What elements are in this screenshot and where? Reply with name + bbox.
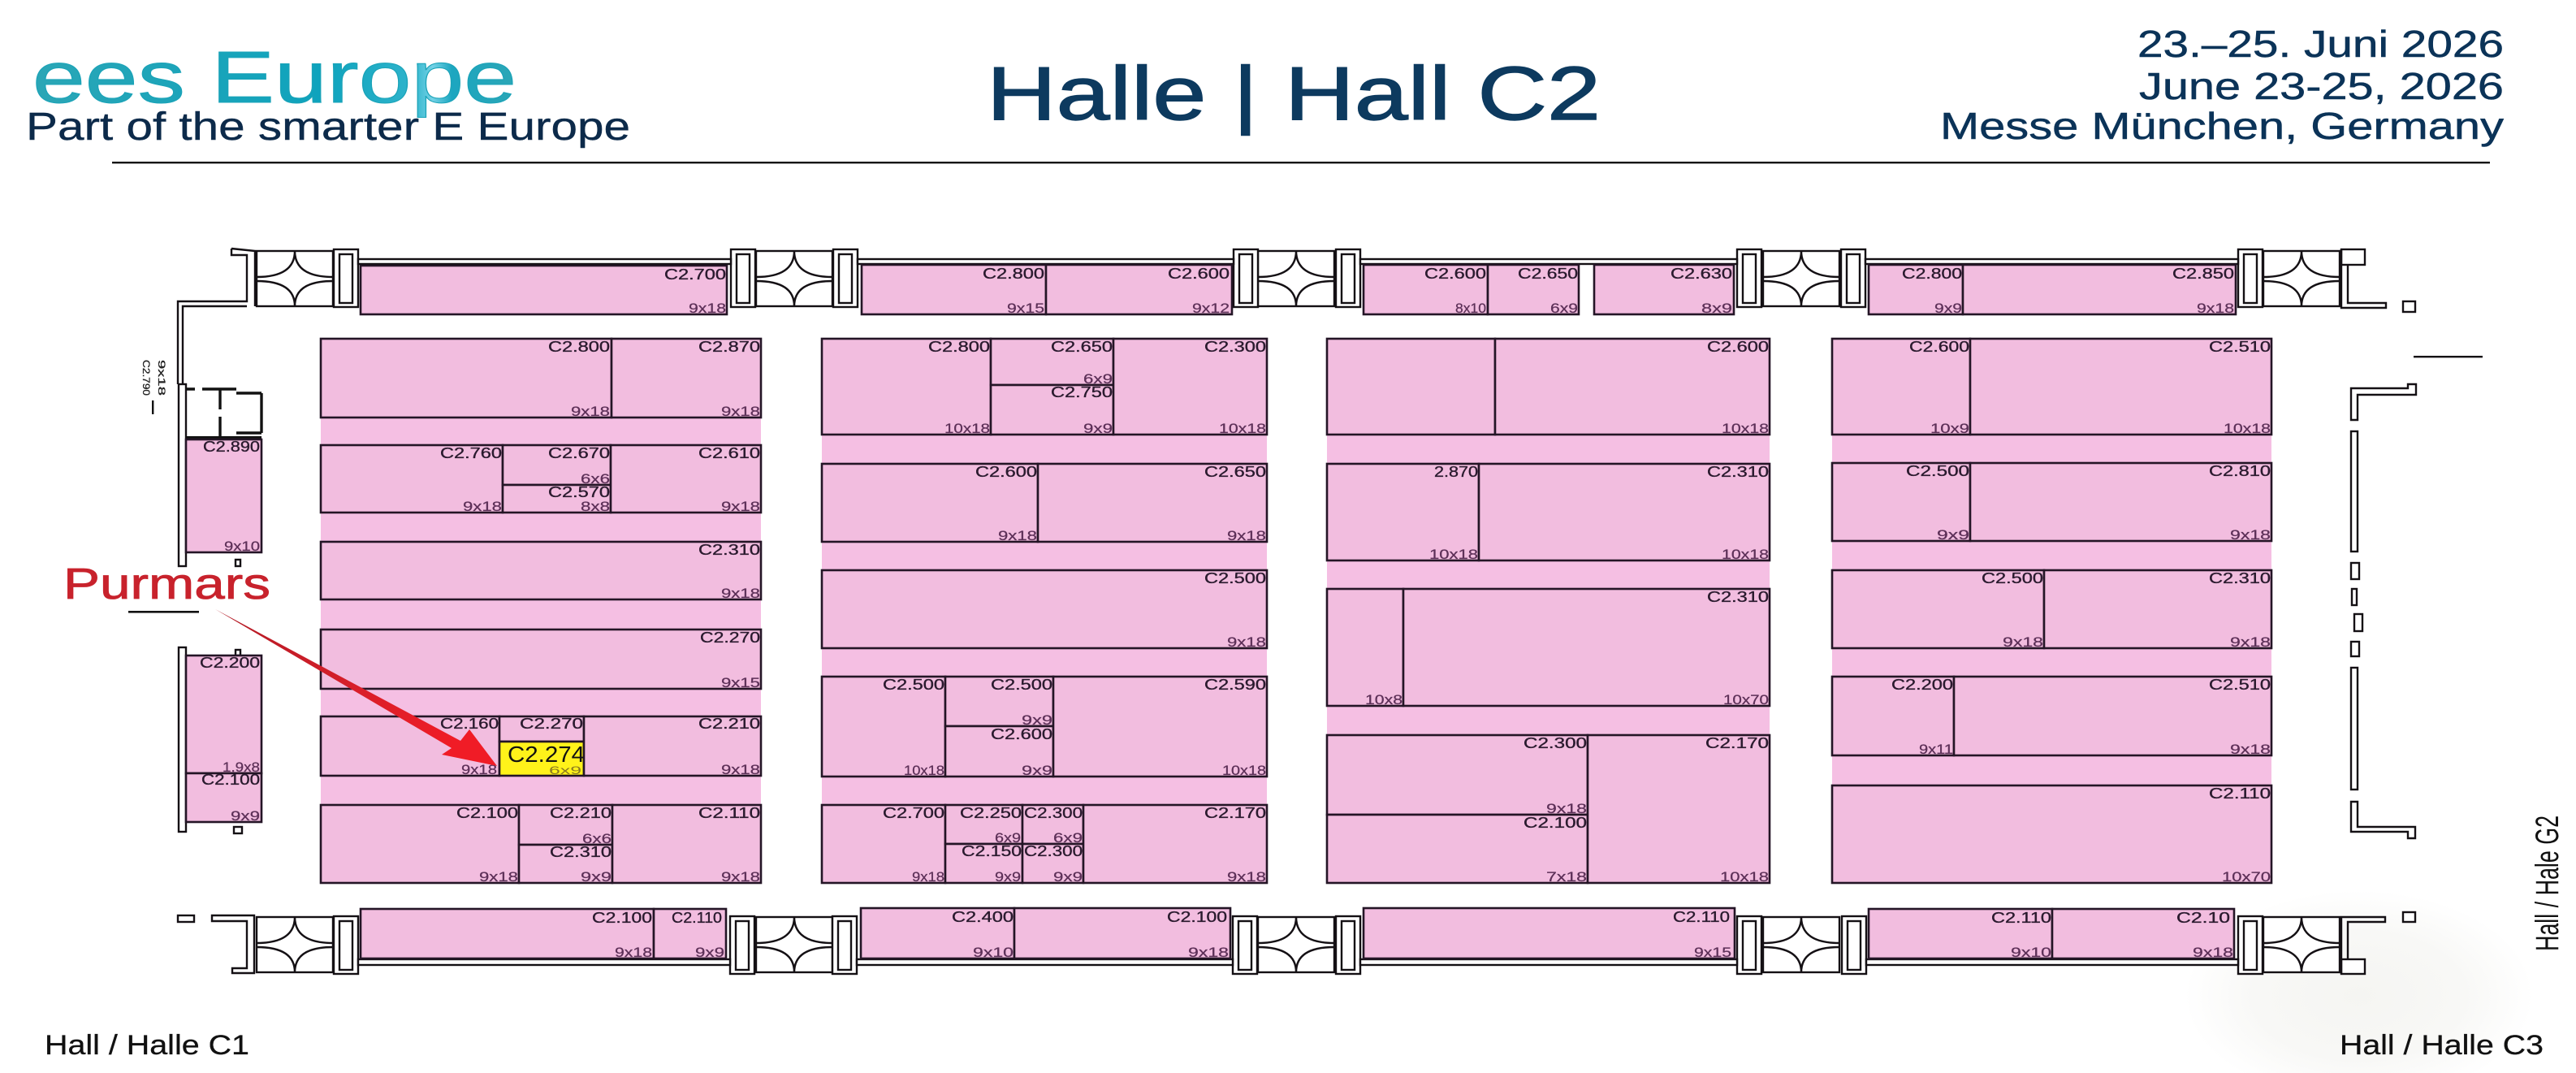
- booth C2.310: [321, 542, 761, 601]
- booths: south strip: [361, 908, 2234, 960]
- booth C2.110: [1832, 785, 2271, 885]
- booth C2.270: [321, 630, 761, 690]
- booth C2.590: [1053, 677, 1267, 778]
- background smudge: [2185, 890, 2534, 1073]
- floor plan: [128, 249, 2483, 974]
- booth C2.300: [1327, 735, 1588, 816]
- booth C2.570: C2.570: [548, 484, 610, 500]
- booth C2.500: [945, 677, 1053, 728]
- booth C2.300: 10x18: [1219, 421, 1266, 436]
- booth C2.850: C2.850: [2172, 266, 2234, 282]
- booths: column 1: [321, 339, 761, 885]
- booth C2.600: [1364, 265, 1488, 316]
- booth C2.200: C2.200: [200, 655, 260, 671]
- booth C2.600: 8x10: [1455, 301, 1486, 316]
- booth C2.500: 9x18: [1227, 634, 1266, 650]
- booth C2.160: [321, 716, 499, 777]
- south wall with doors: [257, 916, 2340, 974]
- booth C2.170: C2.170: [1204, 805, 1266, 821]
- booth C2.800: C2.800: [928, 339, 990, 355]
- booth C2.890: C2.890: [203, 439, 260, 455]
- event dates and venue: [1940, 23, 2504, 147]
- header: [26, 23, 2504, 163]
- booth C2.650: [1488, 265, 1579, 316]
- booth C2.800: [862, 265, 1046, 316]
- booth C2.300: C2.300: [1204, 339, 1266, 355]
- booth C2.500: 9x9: [1937, 527, 1969, 543]
- booth C2.600: [945, 726, 1053, 778]
- booth C2.160: C2.160: [440, 716, 499, 732]
- booth C2.500: C2.500: [1906, 463, 1969, 479]
- event dates and venue: 23.–25. Juni 2026: [2137, 23, 2504, 65]
- callout: Purmars: Purmars: [63, 560, 270, 608]
- booth C2.100: 9x18: [1188, 945, 1229, 960]
- booth C2.100: C2.100: [201, 772, 260, 788]
- booth C2.400: C2.400: [952, 909, 1014, 925]
- booth C2.100: C2.100: [1524, 815, 1587, 831]
- booth C2.650: [1038, 464, 1267, 543]
- highlighted booth C2.274: 6x9: [549, 764, 581, 777]
- underline near callout: [128, 611, 199, 613]
- booth C2.300: C2.300: [1024, 843, 1083, 859]
- booth C2.110: 9x18: [721, 869, 760, 885]
- booth C2.100: C2.100: [456, 805, 518, 821]
- booth C2.100: 9x18: [615, 945, 652, 960]
- booth C2.800: 9x18: [571, 404, 610, 419]
- booth C2.150: [945, 843, 1022, 885]
- booths: column 4: [1832, 339, 2271, 885]
- booth C2.300: 9x18: [1546, 801, 1587, 816]
- booths: column 2: [822, 339, 1267, 885]
- booth C2.510: [1970, 339, 2271, 436]
- booth C2.500: C2.500: [1204, 570, 1266, 586]
- booth C2.800: [1869, 265, 1963, 316]
- booth C2.210: C2.210: [550, 805, 612, 821]
- booth C2.600: C2.600: [1168, 266, 1230, 282]
- booth C2.700: 9x18: [689, 301, 726, 316]
- booth C2.210: 6x6: [582, 831, 612, 846]
- booth C2.570: [503, 484, 611, 514]
- booth C2.210: [519, 805, 612, 846]
- booth C2.610: C2.610: [698, 445, 760, 461]
- booth C2.200: [1832, 677, 1954, 757]
- booth C2.610: 9x18: [721, 499, 760, 514]
- booth C2.760: 9x18: [463, 499, 502, 514]
- booth C2.300: [1022, 805, 1083, 846]
- booth C2.110: C2.110: [1673, 909, 1730, 925]
- booths: north strip: [361, 265, 2236, 316]
- booth C2.310: 9x18: [2230, 634, 2271, 650]
- booth C2.600: 9x18: [998, 528, 1037, 543]
- booth C2.760: [321, 445, 503, 514]
- booth C2.700: [822, 805, 945, 885]
- label: Hall G2: Hall / Hale G2: [2530, 816, 2565, 951]
- booth C2.650: [991, 339, 1113, 387]
- booth C2.310: 9x18: [721, 586, 760, 601]
- booth C2.890: 9x10: [224, 539, 260, 554]
- booth C2.310: [1479, 464, 1770, 562]
- booth C2.850: [1963, 265, 2236, 316]
- booth C2.700: C2.700: [883, 805, 944, 821]
- booth C2.600: C2.600: [1707, 339, 1769, 355]
- label: Hall C1: Hall / Halle C1: [45, 1030, 249, 1061]
- corner walls: [178, 249, 2483, 974]
- booth C2.310: C2.310: [550, 844, 612, 860]
- booth C2.600: 9x12: [1192, 301, 1230, 316]
- booth C2.110: C2.110: [672, 910, 722, 926]
- booth C2.650: 6x9: [1550, 301, 1578, 316]
- logo subtitle: Part of the smarter E Europe: [26, 106, 630, 149]
- booth C2.110: [1869, 909, 2052, 960]
- booth C2.110: C2.110: [1991, 910, 2051, 926]
- booth C2.170: [1588, 735, 1770, 885]
- booth C2.10: C2.10: [2176, 910, 2230, 926]
- booth C2.100: [321, 805, 519, 885]
- booth C2.200: 9x11: [1919, 742, 1953, 757]
- booth C2.300: [1022, 843, 1083, 885]
- booth C2.310: C2.310: [2209, 570, 2271, 586]
- booth C2.600: [1046, 265, 1232, 316]
- booth C2.100: [1014, 908, 1230, 960]
- booth C2.600: C2.600: [975, 464, 1037, 480]
- booth C2.10: 9x18: [2193, 945, 2233, 960]
- booth C2.100: C2.100: [1167, 909, 1227, 925]
- header rule: [112, 162, 2490, 163]
- booth C2.600: C2.600: [991, 726, 1052, 742]
- booth C2.670: 6x6: [581, 471, 610, 487]
- booth C2.510: C2.510: [2209, 339, 2271, 355]
- booth C2.310: C2.310: [698, 542, 760, 558]
- booth C2.630: [1594, 265, 1734, 316]
- booths: column 3: [1327, 339, 1770, 885]
- booth C2.500: 9x18: [2003, 634, 2043, 650]
- booth C2.870: 2.870: [1434, 464, 1478, 480]
- booth C2.600: [1495, 339, 1770, 436]
- booth C2.500: [1832, 463, 1970, 543]
- booth C2.110: 9x10: [2011, 945, 2051, 960]
- booth C2.800: [321, 339, 612, 419]
- booth C2.600: [1832, 339, 1970, 436]
- booth C2.650: 6x9: [1083, 371, 1113, 387]
- booth C2.510: [1954, 677, 2271, 757]
- booth C2.600: 9x9: [1022, 763, 1052, 778]
- logo: ees Europe: ees Europe: [32, 37, 516, 119]
- booth C2.400: 9x10: [973, 945, 1014, 960]
- booth C2.270: C2.270: [520, 716, 583, 732]
- booth C2.310: 10x70: [1723, 692, 1769, 707]
- booth C2.100: 9x9: [231, 808, 260, 824]
- rotated service room label: [140, 360, 167, 396]
- booth C2.300: C2.300: [1024, 805, 1083, 821]
- booth C2.700: C2.700: [664, 266, 726, 283]
- booth C2.810: 9x18: [2230, 527, 2271, 543]
- booth C2.500: [1832, 570, 2044, 650]
- booth C2.210: [584, 716, 761, 777]
- booth C2.310: [1403, 589, 1770, 707]
- booth C2.110: C2.110: [2209, 785, 2271, 802]
- label: Hall C3: Hall / Halle C3: [2340, 1030, 2544, 1061]
- booth C2.150: C2.150: [962, 843, 1022, 859]
- booth C2.810: [1970, 463, 2271, 543]
- booth C2.110: [1364, 908, 1735, 960]
- booth C2.650: C2.650: [1051, 339, 1113, 355]
- booth C2.310: 9x9: [581, 869, 612, 885]
- booth C2.510: C2.510: [2209, 677, 2271, 693]
- booth C2.670: C2.670: [548, 445, 610, 461]
- booth C2.500: 9x9: [1022, 712, 1052, 728]
- booth C2.630: C2.630: [1671, 266, 1732, 282]
- booth C2.590: 10x18: [1222, 763, 1266, 778]
- booth C2.110: C2.110: [698, 805, 760, 821]
- booth C2.160: 9x18: [461, 762, 497, 777]
- booth C2.270: 9x15: [721, 675, 760, 690]
- booth C2.210: C2.210: [698, 716, 760, 732]
- booth C2.870: [612, 339, 761, 419]
- booths: west side: [186, 439, 261, 824]
- booth C2.110: 9x9: [695, 945, 724, 960]
- rotated service room label: C2.790: [140, 360, 152, 396]
- booth C2.600: C2.600: [1424, 266, 1486, 282]
- booth C2.500: C2.500: [991, 677, 1052, 693]
- booth unlabelled: [1327, 339, 1495, 435]
- booth C2.600: 10x18: [1722, 421, 1769, 436]
- booth C2.100: [186, 772, 261, 824]
- booth C2.300: [1113, 339, 1267, 436]
- booth C2.870: 10x18: [1429, 547, 1478, 562]
- booth C2.310: [2044, 570, 2271, 650]
- booth C2.750: C2.750: [1051, 384, 1113, 400]
- booth C2.250: 6x9: [995, 830, 1021, 846]
- booth C2.100: 9x18: [479, 869, 518, 885]
- booth C2.500: [822, 677, 945, 778]
- booth C2.700: 9x18: [912, 869, 944, 885]
- booth C2.500: C2.500: [883, 677, 944, 693]
- booth C2.170: [1083, 805, 1267, 885]
- booth C2.600: C2.600: [1909, 339, 1969, 355]
- booth C2.310: [519, 844, 612, 885]
- booth C2.100: [361, 909, 654, 960]
- booth C2.800: 10x18: [944, 421, 990, 436]
- booth C2.800: 9x15: [1007, 301, 1044, 316]
- north wall with doors: [257, 249, 2340, 307]
- booth C2.800: C2.800: [1902, 266, 1962, 282]
- west wall and service room: [128, 360, 261, 833]
- booth C2.100: 7x18: [1546, 869, 1587, 885]
- booth C2.650: C2.650: [1518, 266, 1578, 282]
- booth C2.600: 10x9: [1930, 421, 1969, 436]
- booth C2.200: 1.9x8: [223, 759, 260, 775]
- booth C2.500: [822, 570, 1267, 650]
- event dates and venue: June 23-25, 2026: [2139, 65, 2504, 107]
- booth C2.630: 8x9: [1701, 301, 1732, 316]
- booth C2.310: C2.310: [1707, 464, 1769, 480]
- booth C2.270: C2.270: [700, 630, 760, 646]
- booth C2.760: C2.760: [440, 445, 502, 461]
- booth C2.110: 10x70: [2222, 869, 2271, 885]
- booth C2.110: 9x15: [1694, 945, 1731, 960]
- booth C2.890: [186, 439, 261, 554]
- booth C2.300: 6x9: [1053, 830, 1083, 846]
- booth C2.800: C2.800: [548, 339, 610, 355]
- booth C2.850: 9x18: [2197, 301, 2234, 316]
- booth C2.700: [361, 266, 727, 316]
- booth C2.750: [991, 384, 1113, 436]
- booth C2.400: [861, 908, 1014, 960]
- highlighted booth C2.274: [499, 742, 585, 777]
- arrow to booth C2.274: [215, 609, 497, 766]
- booth C2.210: 9x18: [721, 762, 760, 777]
- booth C2.510: 10x18: [2224, 421, 2271, 436]
- booth 10x8: [1327, 589, 1403, 707]
- booth C2.170: C2.170: [1705, 735, 1769, 751]
- east wall: [2351, 384, 2416, 838]
- booth C2.510: 9x18: [2230, 742, 2271, 757]
- booth C2.650: C2.650: [1204, 464, 1266, 480]
- booth C2.750: 9x9: [1083, 421, 1113, 436]
- booth C2.670: [503, 445, 611, 487]
- booth C2.870: 9x18: [721, 404, 760, 419]
- booth C2.10: [2052, 909, 2234, 960]
- booth C2.110: [612, 805, 761, 885]
- booth C2.200: C2.200: [1891, 677, 1953, 693]
- booth C2.100: C2.100: [592, 910, 652, 926]
- event dates and venue: Messe München, Germany: [1940, 105, 2504, 147]
- booth C2.300: 9x9: [1053, 869, 1083, 885]
- booth C2.870: [1327, 464, 1479, 562]
- booth C2.500: 10x18: [904, 763, 944, 778]
- booth C2.500: C2.500: [1982, 570, 2043, 586]
- booth C2.600: [822, 464, 1038, 543]
- booth C2.250: [945, 805, 1022, 846]
- booth C2.590: C2.590: [1204, 677, 1266, 693]
- booth C2.610: [611, 445, 761, 514]
- booth C2.800: C2.800: [983, 266, 1044, 282]
- booth C2.800: 9x9: [1934, 301, 1962, 316]
- booth C2.870: C2.870: [698, 339, 760, 355]
- booth C2.100: [1327, 815, 1588, 885]
- booth C2.650: 9x18: [1227, 528, 1266, 543]
- booth C2.250: C2.250: [960, 805, 1022, 821]
- booth C2.270: [499, 716, 584, 742]
- booth C2.170: 10x18: [1720, 869, 1769, 885]
- booth C2.310: C2.310: [1707, 589, 1769, 605]
- booth C2.310: 10x18: [1722, 547, 1769, 562]
- booth C2.800: [822, 339, 991, 436]
- booth C2.300: C2.300: [1524, 735, 1587, 751]
- booth C2.150: 9x9: [995, 869, 1021, 885]
- booth C2.570: 8x8: [581, 499, 610, 514]
- booth C2.200: [186, 655, 261, 775]
- highlighted booth C2.274: C2.274: [508, 742, 585, 767]
- rotated service room label: 9x18: [156, 360, 167, 396]
- booth C2.810: C2.810: [2209, 463, 2271, 479]
- booth C2.110: [654, 909, 726, 960]
- aisles: [321, 339, 2271, 883]
- title: Halle | Hall C2: [987, 51, 1601, 136]
- booth 10x8: 10x8: [1365, 692, 1403, 707]
- booth C2.170: 9x18: [1227, 869, 1266, 885]
